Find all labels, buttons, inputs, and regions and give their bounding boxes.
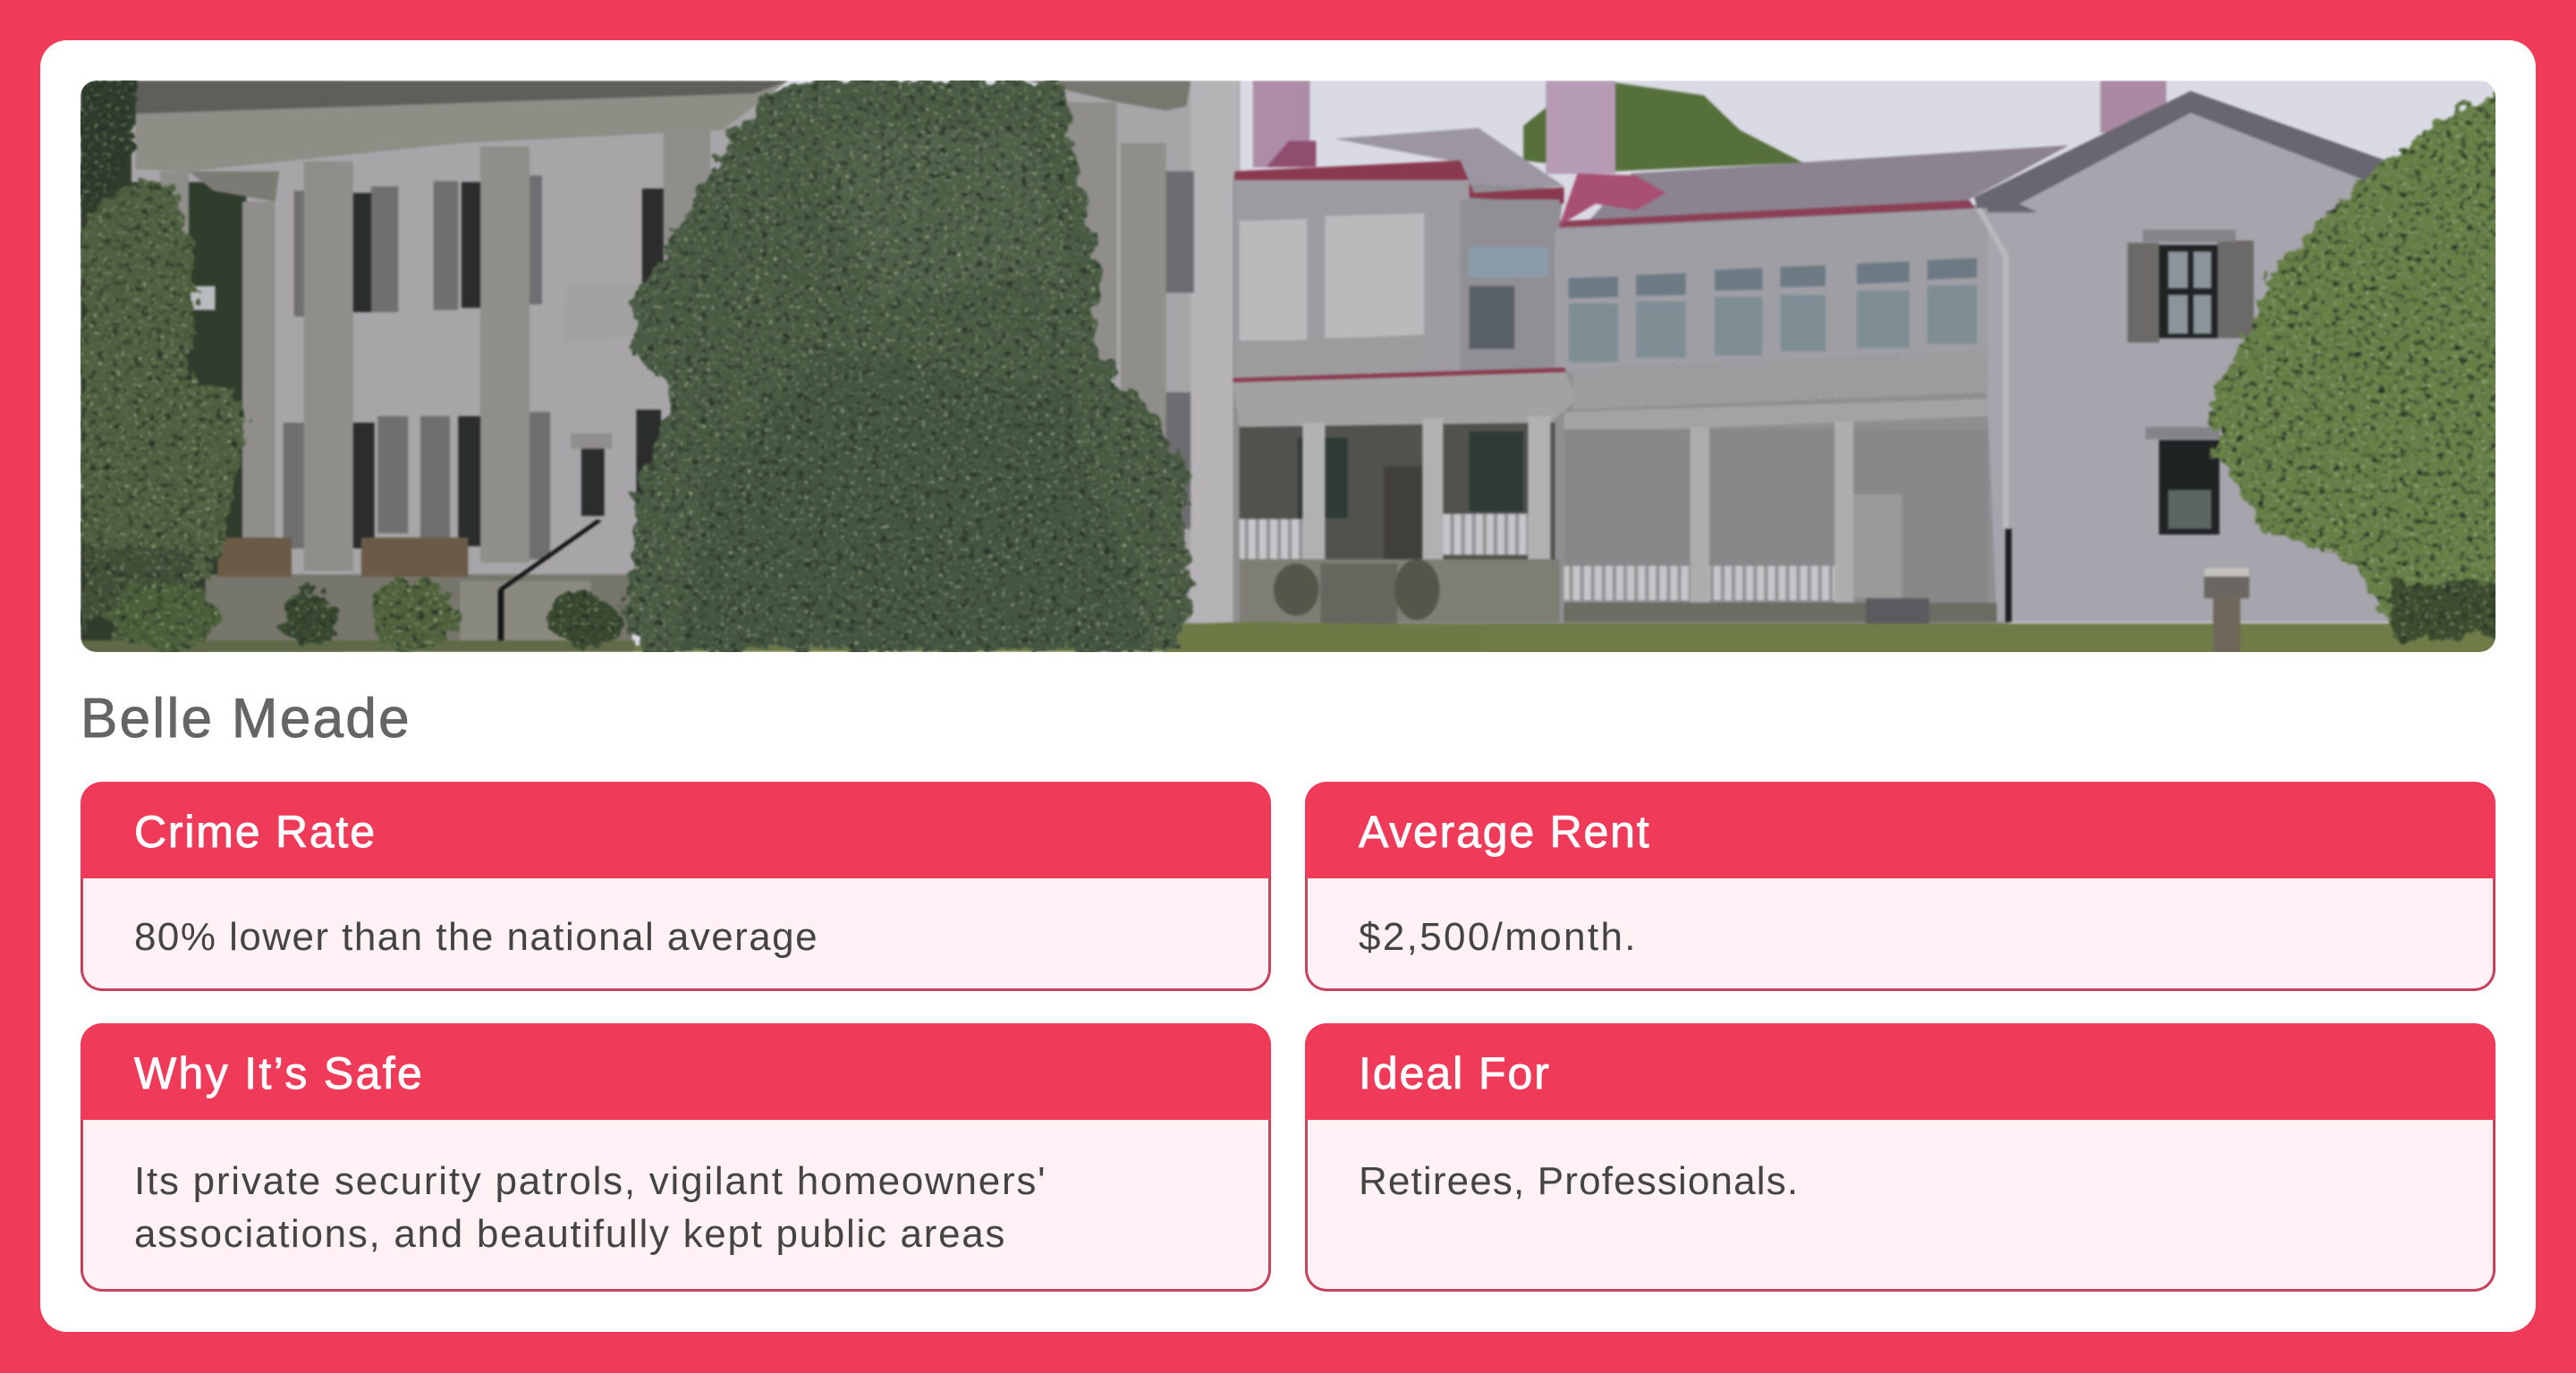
card heading xyxy=(1305,1023,2496,1120)
upper windows and shutters xyxy=(284,175,550,559)
card heading: Why It’s Safe xyxy=(134,1048,424,1098)
right porch xyxy=(1563,399,1987,429)
left porch xyxy=(1240,423,1555,562)
card: Ideal For xyxy=(1305,1023,2496,1292)
tree: large centre conifer xyxy=(624,81,1191,652)
gable wing xyxy=(1987,112,2390,623)
metal roofs xyxy=(1335,128,1564,191)
heading: Belle Meade: Belle Meade xyxy=(80,688,411,750)
tree: left xyxy=(80,81,246,624)
background foliage xyxy=(1523,82,1803,171)
sunroom windows xyxy=(1569,258,1977,298)
chimney xyxy=(1546,81,1615,174)
columns xyxy=(160,102,1166,571)
mailbox xyxy=(2213,598,2241,652)
card heading: Average Rent xyxy=(1359,807,1650,857)
right house section xyxy=(1163,81,2497,654)
lawn xyxy=(1163,623,2497,654)
card body text: $2,500/month. xyxy=(1359,915,1638,959)
left bay xyxy=(1235,180,1470,379)
card body text xyxy=(1305,1120,2496,1292)
card body text: associations, and beautifully kept public areas xyxy=(134,1212,1006,1256)
left lawn xyxy=(633,621,1397,652)
card: Crime Rate xyxy=(80,782,1271,991)
card heading xyxy=(1305,782,2496,878)
tree: right xyxy=(2213,87,2506,638)
card heading: Crime Rate xyxy=(134,807,377,857)
card heading xyxy=(80,1023,1271,1120)
card: Average Rent xyxy=(1305,782,2496,991)
card heading xyxy=(80,782,1271,878)
card body text xyxy=(1305,878,2496,991)
middle bay xyxy=(1461,199,1560,373)
porch base and steps xyxy=(206,574,632,652)
card: Why It's Safe xyxy=(80,1023,1271,1292)
card body text: 80% lower than the national average xyxy=(134,915,818,959)
downpipe xyxy=(1979,208,2009,623)
shrubs xyxy=(109,581,623,649)
left house section xyxy=(80,81,1240,653)
photo: Belle Meade mansion xyxy=(80,81,2496,652)
card heading: Ideal For xyxy=(1359,1048,1551,1098)
card body text: Its private security patrols, vigilant homeowners' xyxy=(134,1159,1046,1203)
sky xyxy=(631,81,2495,646)
card body text xyxy=(80,1120,1271,1292)
card body text xyxy=(80,878,1271,991)
card body text: Retirees, Professionals. xyxy=(1359,1159,1799,1203)
